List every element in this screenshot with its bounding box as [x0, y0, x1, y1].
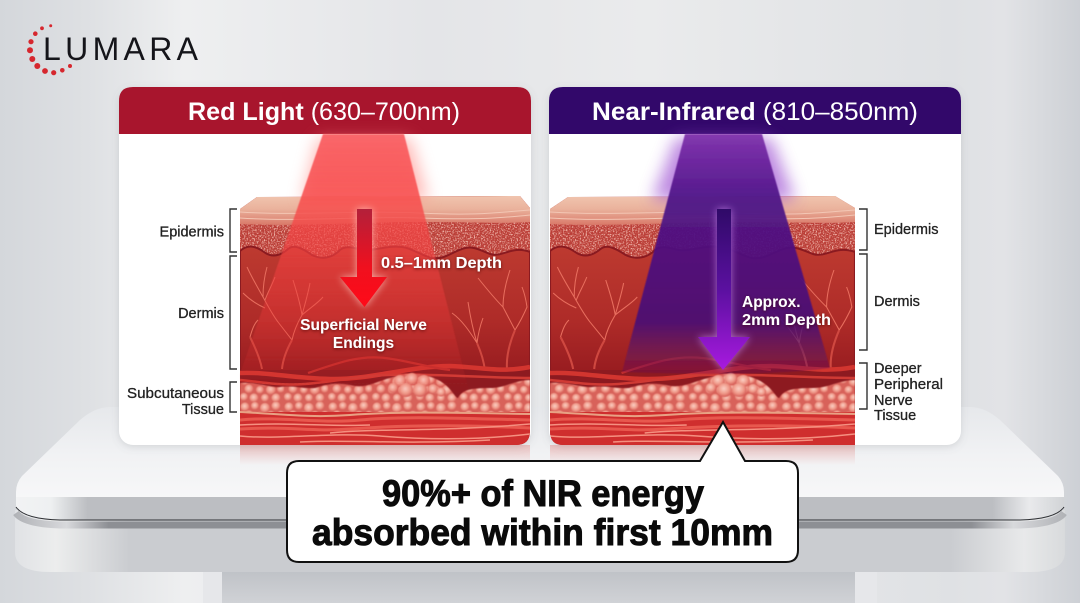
brackets — [859, 209, 867, 409]
skin cross-section — [550, 196, 855, 445]
table — [15, 407, 1065, 603]
arrow — [698, 209, 750, 370]
depth label — [742, 294, 831, 329]
header: Red Light (630–700nm) — [188, 98, 460, 126]
card — [119, 87, 531, 445]
depth label: 2mm Depth — [742, 312, 831, 329]
depth label: 0.5–1mm Depth — [381, 255, 502, 272]
panel: red light — [119, 87, 531, 445]
layer labels: Nerve — [874, 393, 913, 409]
light beam — [240, 134, 470, 395]
header — [119, 87, 531, 134]
card — [549, 87, 961, 445]
brackets — [230, 209, 237, 412]
layer labels: Deeper — [874, 361, 922, 377]
layer labels: Epidermis — [160, 224, 224, 240]
icon: dotted arc — [27, 24, 72, 75]
layer labels: Tissue — [874, 408, 916, 424]
layer labels: Peripheral — [874, 377, 943, 393]
callout — [287, 422, 798, 562]
logo — [27, 24, 199, 75]
nerve label — [300, 317, 427, 352]
layer labels: Epidermis — [874, 222, 938, 238]
nerve label: Superficial Nerve — [300, 317, 427, 334]
nerve label: Endings — [333, 335, 394, 352]
callout: absorbed within first 10mm — [312, 512, 773, 553]
header — [549, 87, 961, 134]
layer labels — [127, 224, 224, 418]
panel: near-infrared — [549, 87, 961, 445]
layer labels: Subcutaneous — [127, 386, 224, 402]
wordmark: LUMARA — [43, 31, 199, 67]
arrow — [340, 209, 387, 307]
layer labels: Dermis — [874, 294, 920, 310]
header: Near-Infrared (810–850nm) — [592, 98, 918, 126]
layer labels — [874, 222, 943, 424]
layer labels: Dermis — [178, 306, 224, 322]
skin cross-section — [240, 196, 530, 445]
depth label: Approx. — [742, 294, 801, 311]
layer labels: Tissue — [182, 402, 224, 418]
callout: 90%+ of NIR energy — [382, 473, 704, 514]
light beam — [622, 134, 830, 374]
